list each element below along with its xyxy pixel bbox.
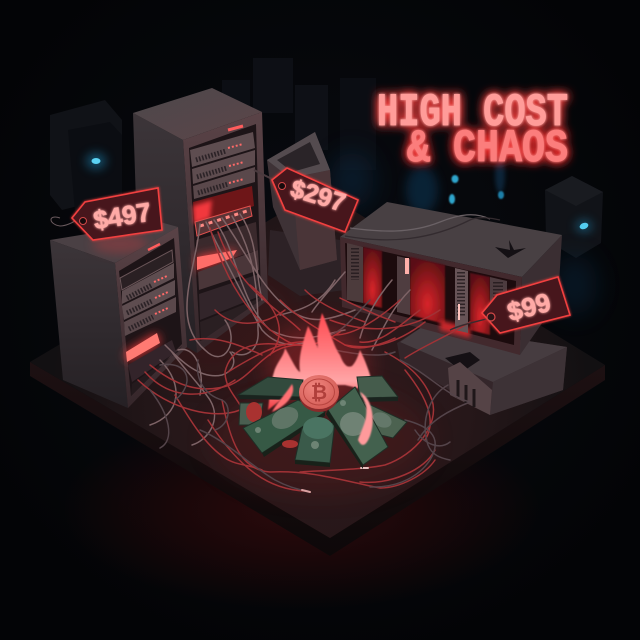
lower right broken box xyxy=(397,325,567,415)
cash pile xyxy=(238,376,407,469)
rack units xyxy=(120,244,176,336)
side face xyxy=(50,240,128,408)
bill: centre bottom xyxy=(295,422,335,463)
vent panels xyxy=(347,243,363,303)
left server rack xyxy=(50,222,187,408)
bitcoin coin: ₿ xyxy=(311,382,327,404)
price tag: $99 xyxy=(450,277,570,333)
bill: right back xyxy=(357,376,398,398)
front frame xyxy=(340,237,522,355)
title xyxy=(377,87,568,175)
price tag: $99: $99 xyxy=(504,287,554,327)
flame licks over cash xyxy=(272,384,373,445)
tangled cables xyxy=(138,214,470,492)
bill: back left xyxy=(238,377,303,397)
top xyxy=(340,202,562,277)
lower units xyxy=(196,222,258,270)
flames behind cash xyxy=(268,313,374,410)
price tag: $497 xyxy=(51,188,162,240)
glowing bar xyxy=(126,333,160,362)
tall server rack xyxy=(133,88,268,353)
floor glow xyxy=(60,410,540,610)
side face xyxy=(133,113,197,353)
red glowing bay xyxy=(193,186,254,226)
front face xyxy=(115,227,187,408)
rack units xyxy=(190,126,255,199)
large open server xyxy=(340,202,562,355)
bill: lower left large xyxy=(243,400,325,453)
crack on top xyxy=(495,240,526,258)
top face xyxy=(50,222,178,263)
top cables xyxy=(350,215,490,231)
title line 1: HIGH COST xyxy=(377,87,568,139)
top face xyxy=(133,88,262,140)
red coin under pile xyxy=(282,440,298,448)
cable ends xyxy=(302,490,310,492)
cables: grey dark xyxy=(150,300,470,491)
front face xyxy=(183,112,268,353)
cables: red xyxy=(138,228,470,491)
price tag: $297 xyxy=(254,168,358,232)
bent box behind price tag xyxy=(267,132,345,296)
background dim servers and blue lights xyxy=(50,58,603,315)
bill: right low xyxy=(360,400,407,438)
right side xyxy=(520,235,562,355)
platform xyxy=(30,190,605,556)
bill: right large xyxy=(328,387,388,465)
bitcoin coin xyxy=(299,375,339,412)
red chambers xyxy=(363,247,382,308)
title line 2: & CHAOS xyxy=(407,123,568,175)
cables: tall rack fan xyxy=(150,214,410,445)
bill: small left with red coin xyxy=(239,403,263,425)
price tag: $497: $497 xyxy=(91,197,153,235)
price tag: $297: $297 xyxy=(287,174,349,218)
